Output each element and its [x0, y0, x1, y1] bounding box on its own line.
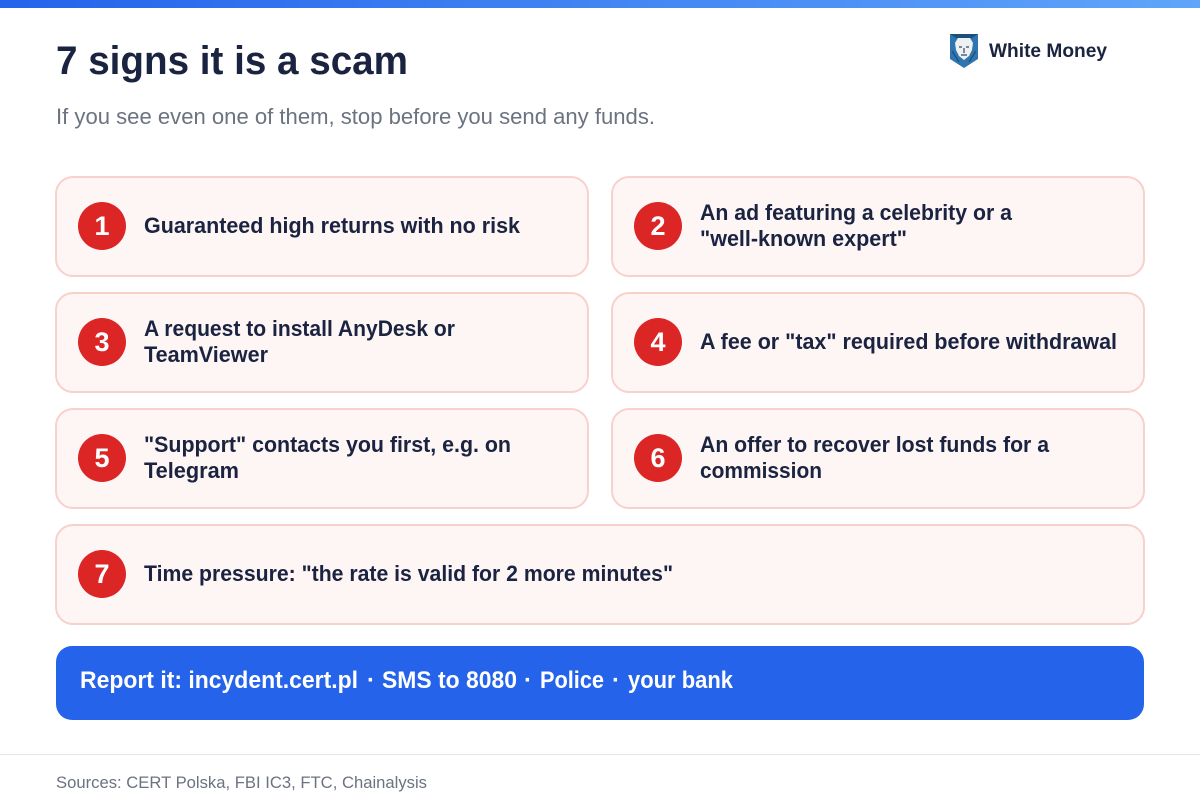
logo wordmark: White Money: [989, 41, 1107, 62]
sources footer: Sources: CERT Polska, FBI IC3, FTC, Chainalysis: [56, 773, 427, 792]
panel: sign 4: [612, 293, 1144, 392]
panel: sign 2: [612, 177, 1144, 276]
panel: sign 3: 3: [94, 327, 110, 357]
callout: report banner: ·: [612, 667, 620, 694]
callout: report banner: your bank: [628, 667, 734, 694]
panel: sign 1: 1: [94, 211, 110, 241]
subtitle: If you see even one of them, stop before you send any funds.: [56, 104, 655, 129]
panel: sign 5: 5: [94, 443, 110, 473]
callout: report banner: ·: [524, 667, 532, 694]
title: 7 signs it is a scam: [56, 39, 408, 83]
panel: sign 1: [56, 177, 588, 276]
callout: report banner: Police: [540, 667, 604, 694]
panel: sign 1: Guaranteed high returns with no risk: [144, 213, 521, 238]
panel: sign 6: An offer to recover lost funds for a: [700, 432, 1050, 457]
icon: lion shield: [950, 34, 978, 68]
panel: sign 2: An ad featuring a celebrity or a: [700, 200, 1013, 225]
panel: sign 6: 6: [650, 443, 666, 473]
panel: sign 3: TeamViewer: [144, 342, 268, 367]
panel: sign 7: Time pressure: "the rate is valid for 2 more minutes": [144, 561, 673, 586]
callout: report banner: [56, 646, 1144, 720]
panel: sign 5: [56, 409, 588, 508]
panel: sign 6: [612, 409, 1144, 508]
callout: report banner: Report it: incydent.cert.pl: [80, 667, 358, 694]
panel: sign 4: 4: [650, 327, 666, 357]
panel: sign 4: A fee or "tax" required before withdrawal: [700, 329, 1117, 354]
panel: sign 2: "well-known expert": [700, 226, 907, 251]
top gradient bar: [0, 0, 1200, 8]
panel: sign 3: A request to install AnyDesk or: [144, 316, 455, 341]
panel: sign 5: Telegram: [144, 458, 239, 483]
callout: report banner: ·: [367, 667, 375, 694]
panel: sign 3: [56, 293, 588, 392]
panel: sign 5: "Support" contacts you first, e.g. on: [144, 432, 511, 457]
callout: report banner: SMS to 8080: [382, 667, 517, 694]
panel: sign 7: 7: [94, 559, 110, 589]
panel: sign 2: 2: [650, 211, 666, 241]
logo: White Money: [950, 34, 1107, 68]
panel: sign 6: commission: [700, 458, 822, 483]
panel: sign 7: [56, 525, 1144, 624]
